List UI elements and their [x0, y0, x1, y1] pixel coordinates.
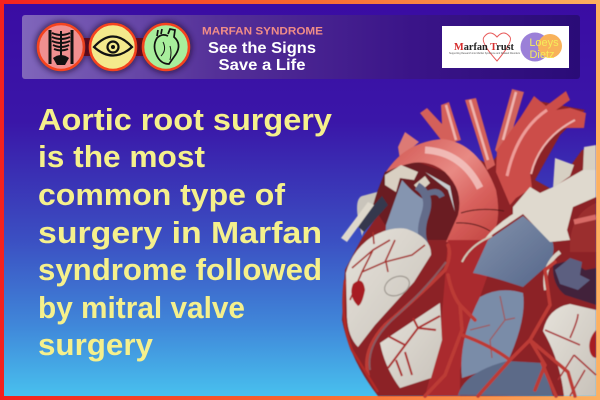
- bottom blue ventricle: [458, 361, 553, 396]
- central red muscle: [425, 240, 500, 396]
- main message: by mitral valve: [38, 290, 245, 325]
- logo panel: [442, 26, 569, 68]
- Loeys Dietz logo: Loeys: [529, 37, 559, 49]
- main coronary vessels: [367, 245, 575, 396]
- Marfan Trust logo: Marfan Trust: [454, 41, 514, 53]
- Marfan Trust logo: Supporting Research into Marfan Syndrome and Related Disorders: [449, 51, 520, 55]
- icon: heart: [140, 21, 192, 73]
- connector bar behind icons: [60, 38, 166, 56]
- heart illustration: [341, 89, 596, 396]
- right white chamber: [543, 304, 596, 396]
- upper blue ventricle: [473, 216, 554, 287]
- main message: is the most: [38, 139, 205, 174]
- banner title: Save a Life: [218, 57, 306, 74]
- Loeys Dietz logo: [520, 32, 562, 62]
- dark interior: [372, 160, 465, 240]
- Loeys Dietz logo: Dietz: [529, 49, 555, 61]
- aortic arch: [386, 139, 498, 242]
- main message: [38, 102, 333, 362]
- lower blue ventricle: [461, 290, 524, 378]
- main message: common type of: [38, 177, 286, 212]
- lower-left white chamber: [346, 228, 431, 347]
- aortic branches: [398, 89, 524, 170]
- header banner: [22, 15, 580, 79]
- banner title: MARFAN SYNDROME: [202, 26, 323, 38]
- heart silhouette: [342, 100, 596, 396]
- upper white connectors: [385, 165, 418, 192]
- icon: skeleton: [35, 21, 87, 73]
- right vessel: [496, 91, 586, 205]
- icon: eye: [87, 21, 139, 73]
- main message: Aortic root surgery: [38, 102, 333, 137]
- coronary branches left: [350, 232, 425, 300]
- dark valve on right: [553, 260, 596, 305]
- bottom-left white chamber: [380, 303, 442, 388]
- banner title: See the Signs: [208, 40, 316, 57]
- right white upper panel: [483, 168, 596, 242]
- Marfan Trust logo: [449, 33, 520, 61]
- main message: syndrome followed: [38, 252, 322, 287]
- main message: surgery: [38, 327, 154, 362]
- blue veins upper: [385, 180, 425, 240]
- main message: surgery in Marfan: [38, 215, 322, 250]
- banner title: [202, 26, 323, 74]
